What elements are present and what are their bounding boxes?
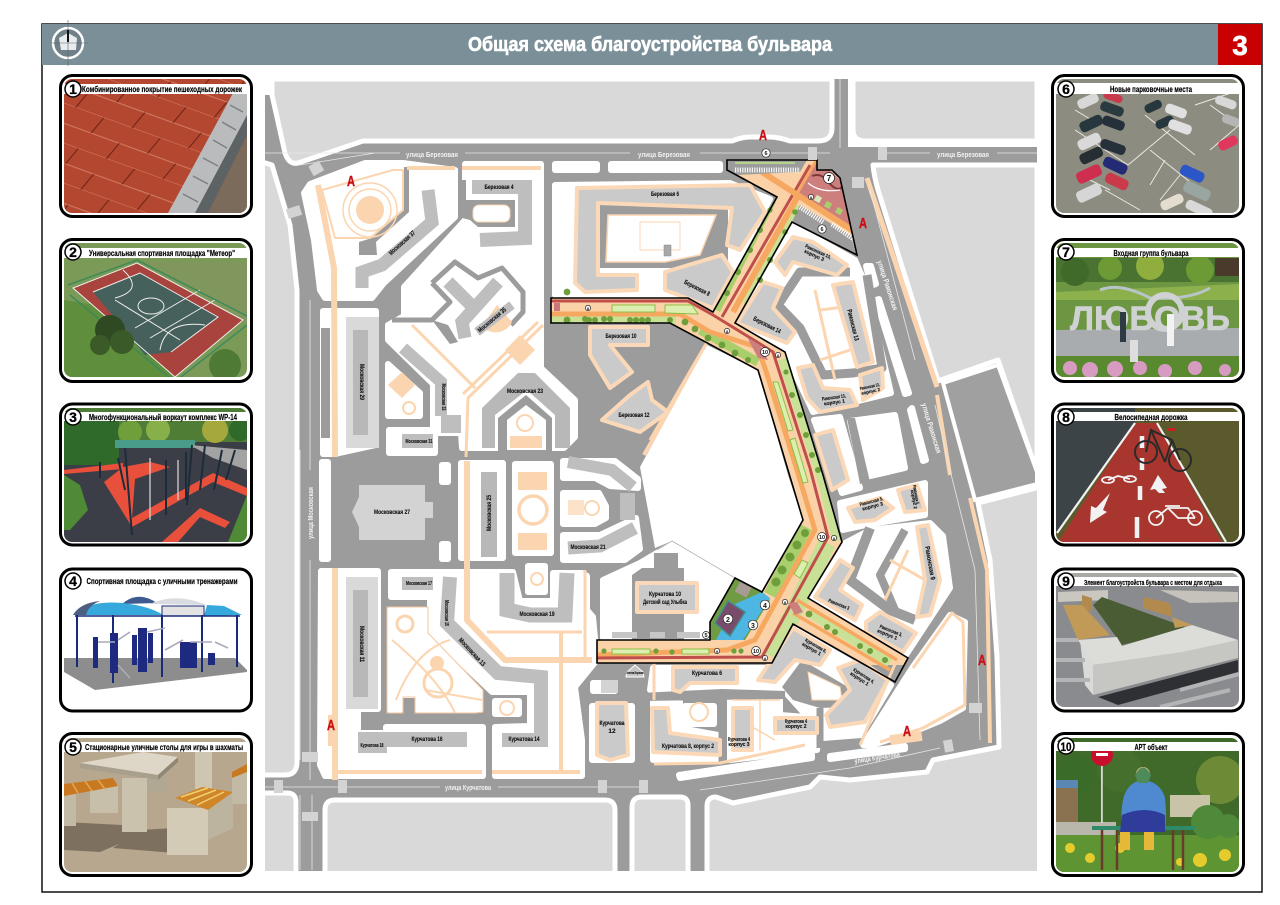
residential blocks xyxy=(304,163,965,778)
pedestrian crossings xyxy=(274,147,982,821)
caption xyxy=(64,742,247,752)
number badge xyxy=(65,409,81,425)
building labels: Курчатова xyxy=(600,720,625,727)
caption: Универсальная спортивная площадка "Метеор" xyxy=(89,248,235,258)
photo: red paving with curb xyxy=(64,79,247,213)
building labels: Московская 17 xyxy=(406,581,432,587)
number badge: 3 xyxy=(69,409,77,425)
building labels: Московская 35 xyxy=(477,306,508,334)
caption xyxy=(1056,248,1239,258)
plan number badges: 8 xyxy=(833,536,836,541)
plan number badges: 8 xyxy=(587,306,590,311)
number badge xyxy=(1058,409,1074,425)
card 2: sports ground xyxy=(60,240,252,382)
number badge xyxy=(1058,573,1074,589)
number badge: 5 xyxy=(69,739,77,755)
building labels: корпус 1 xyxy=(824,398,846,407)
plan number badges: 8 xyxy=(784,600,787,605)
plan number badges: 6 xyxy=(820,227,824,233)
street labels: улица Березовая xyxy=(937,150,989,159)
building labels: Московская 15 xyxy=(443,600,449,626)
number badge xyxy=(65,573,81,589)
plan number badges: 5 xyxy=(704,633,708,639)
card 7: entrance group xyxy=(1052,240,1244,382)
caption xyxy=(1056,412,1239,422)
photo: park with letters xyxy=(1056,243,1239,378)
building labels: Рамонская 3, xyxy=(878,624,903,639)
caption: Спортивная площадка с уличными тренажерами xyxy=(86,576,238,586)
number badge: 1 xyxy=(69,81,77,97)
caption xyxy=(1056,742,1239,752)
building labels: корпус 1 xyxy=(849,671,870,688)
building labels: Детский сад Улыбка xyxy=(643,598,687,606)
caption: Многофункциональный воркаут комплекс WP-14 xyxy=(89,412,237,422)
parking lot xyxy=(943,365,1037,500)
site plan map xyxy=(262,79,1040,875)
card 9: planter with benches xyxy=(1052,569,1244,711)
street labels: улица Рамонская xyxy=(875,259,900,311)
caption: Велосипедная дорожка xyxy=(1114,412,1188,422)
page number box: 3 xyxy=(1232,30,1248,61)
card 4: outdoor gym xyxy=(60,569,252,711)
building labels: Московская 13 xyxy=(457,637,487,668)
building labels: Рамонская 13, xyxy=(804,244,832,261)
boulevard improvement zone xyxy=(551,160,911,682)
street labels xyxy=(306,150,989,792)
street labels: улица Московская xyxy=(306,487,315,539)
building labels: корпус 2 xyxy=(910,490,918,510)
building labels: Березовая 10 xyxy=(606,333,637,340)
plan number badges: 10 xyxy=(819,535,825,541)
boulevard boundary xyxy=(551,160,908,682)
section markers A xyxy=(327,127,986,740)
building labels: Аптека Березка xyxy=(626,671,644,675)
number badge xyxy=(1058,244,1074,260)
building labels: Курчатова 6 xyxy=(692,670,722,677)
section markers A: А xyxy=(327,717,335,734)
building labels: Рамонская 13 xyxy=(845,309,860,342)
building labels: Курчатова 6, xyxy=(804,638,828,655)
card 5: chess tables xyxy=(60,734,252,876)
building labels: Рамонская 3 xyxy=(827,598,850,612)
building labels: Курчатова 18 xyxy=(360,743,384,749)
building labels: Курчатова 4 xyxy=(728,737,750,743)
number badge xyxy=(65,244,81,260)
street labels: улица Курчатова xyxy=(445,783,492,792)
plan number badges xyxy=(585,149,837,661)
section markers A: А xyxy=(978,652,986,669)
building labels: Березовая 6 xyxy=(651,191,679,198)
section markers A: А xyxy=(347,173,355,190)
building labels: 12 xyxy=(608,728,616,735)
number badge xyxy=(65,739,81,755)
building labels: Московская 31 xyxy=(406,439,433,445)
building labels: Курчатова 8, корпус 2 xyxy=(662,743,714,750)
number badge: 9 xyxy=(1062,573,1070,589)
caption: Стационарные уличные столы для игры в шахматы xyxy=(85,742,243,752)
building labels: Рамонская 13, xyxy=(859,382,880,391)
building labels: Курчатова 14 xyxy=(508,736,540,743)
number badge: 7 xyxy=(1062,244,1070,260)
section markers A: А xyxy=(903,723,911,740)
photo: gym canopy xyxy=(64,597,247,690)
building labels: Рамонская 13, xyxy=(822,393,847,403)
caption xyxy=(1056,577,1239,587)
number badge xyxy=(1058,81,1074,97)
street labels: улица Рамонская xyxy=(920,402,943,454)
central white plot xyxy=(640,345,803,592)
caption xyxy=(64,248,247,258)
surrounding light grey plots xyxy=(262,79,1040,875)
building labels: Московская 19 xyxy=(520,611,555,618)
caption: Входная группа бульвара xyxy=(1114,248,1189,258)
plan number badges: 10 xyxy=(762,350,768,356)
building labels: Московская 33 xyxy=(440,384,446,411)
plan number badges: 8 xyxy=(810,195,813,200)
trees xyxy=(564,207,888,663)
photo: red bicycle lane xyxy=(1056,408,1239,542)
sports grounds xyxy=(710,578,770,640)
building labels: Московская 11 xyxy=(358,626,365,662)
building labels: корпус 3 xyxy=(862,501,884,513)
caption: АРТ объект xyxy=(1134,742,1168,752)
card 3: workout complex xyxy=(60,404,252,545)
title: Общая схема благоустройства бульвара xyxy=(468,34,833,56)
photo: statue on bench xyxy=(1055,738,1244,872)
building labels: Московская 21 xyxy=(570,544,606,551)
card 1: paving xyxy=(60,76,252,216)
building labels: Курчатова 10 xyxy=(649,591,681,598)
card 10: art object xyxy=(1052,734,1244,876)
building labels: Рамонская 9 xyxy=(923,546,936,581)
number badge xyxy=(65,81,81,97)
caption: Комбинированное покрытие пешеходных дорожек xyxy=(82,84,243,94)
plan number badges: 8 xyxy=(726,329,729,334)
building labels: корпус 2 xyxy=(785,724,807,730)
plan number badges: 9 xyxy=(716,649,719,654)
inner driveways xyxy=(321,167,915,765)
street centre lines xyxy=(265,79,1037,870)
photo: concrete tables and benches xyxy=(64,738,247,872)
number badge: 6 xyxy=(1062,81,1070,97)
street labels: улица Курчатова xyxy=(854,749,901,766)
street labels: улица Березовая xyxy=(406,150,458,159)
card 8: bike lane xyxy=(1052,404,1244,545)
caption: Новые парковочные места xyxy=(1110,84,1192,94)
number badge: 2 xyxy=(69,244,77,260)
building labels: корпус 1 xyxy=(801,642,822,657)
section markers A: А xyxy=(859,215,867,232)
building labels: Курчатова 4 xyxy=(785,719,807,725)
building labels: Березовая 14 xyxy=(752,316,782,335)
building labels: Рамонская 5, xyxy=(859,496,884,508)
building labels: Курчатова 4, xyxy=(852,667,876,685)
building labels: Березовая 12 xyxy=(618,412,650,419)
number badge: 8 xyxy=(1062,409,1070,425)
road base xyxy=(265,79,1037,871)
building labels: корпус 1 xyxy=(876,628,898,642)
building labels: Курчатова 16 xyxy=(412,736,443,743)
card 6: parking xyxy=(1052,76,1245,219)
icon: logo xyxy=(51,20,88,66)
peach footpaths xyxy=(318,168,990,780)
building labels: корпус 3 xyxy=(728,742,750,748)
plan number badges: 4 xyxy=(763,603,767,610)
building labels: Рамонская 5, xyxy=(912,485,920,505)
photo: basketball court xyxy=(64,243,247,381)
photo: park with letters: ЛЮБОВЬ xyxy=(1070,300,1230,338)
plan number badges: 8 xyxy=(764,656,767,661)
photo: workout ground xyxy=(64,408,251,542)
building labels: корпус 3 xyxy=(803,249,825,263)
building labels: Московская 37 xyxy=(388,230,417,257)
number badge: 4 xyxy=(69,573,77,589)
building labels: Московская 29 xyxy=(358,364,365,400)
building labels: Березовая 8 xyxy=(683,279,711,298)
header band xyxy=(42,24,1262,65)
number badge: 10 xyxy=(1060,740,1072,754)
photo: concrete planter xyxy=(1056,573,1239,707)
street labels: улица Березовая xyxy=(638,150,690,159)
building labels: Московская 23 xyxy=(507,388,543,395)
building labels: Березовая 4 xyxy=(484,184,514,191)
caption xyxy=(1056,83,1239,94)
building labels: Московская 27 xyxy=(374,509,410,516)
buildings xyxy=(346,185,940,760)
photo: parking lot xyxy=(1056,79,1245,219)
plan number badges: 3 xyxy=(751,623,755,630)
plan number badges: 10 xyxy=(753,649,759,655)
building labels xyxy=(358,184,936,750)
plan number badges: 6 xyxy=(764,151,768,157)
caption xyxy=(64,412,247,422)
building labels: Московская 25 xyxy=(486,495,493,531)
plan number badges: 2 xyxy=(726,617,730,624)
plan number badges: 7 xyxy=(827,174,832,183)
page number box xyxy=(1218,24,1262,65)
plan number badges: 8 xyxy=(777,353,780,358)
building labels: корпус 2 xyxy=(861,387,881,396)
section markers A: А xyxy=(759,127,767,144)
